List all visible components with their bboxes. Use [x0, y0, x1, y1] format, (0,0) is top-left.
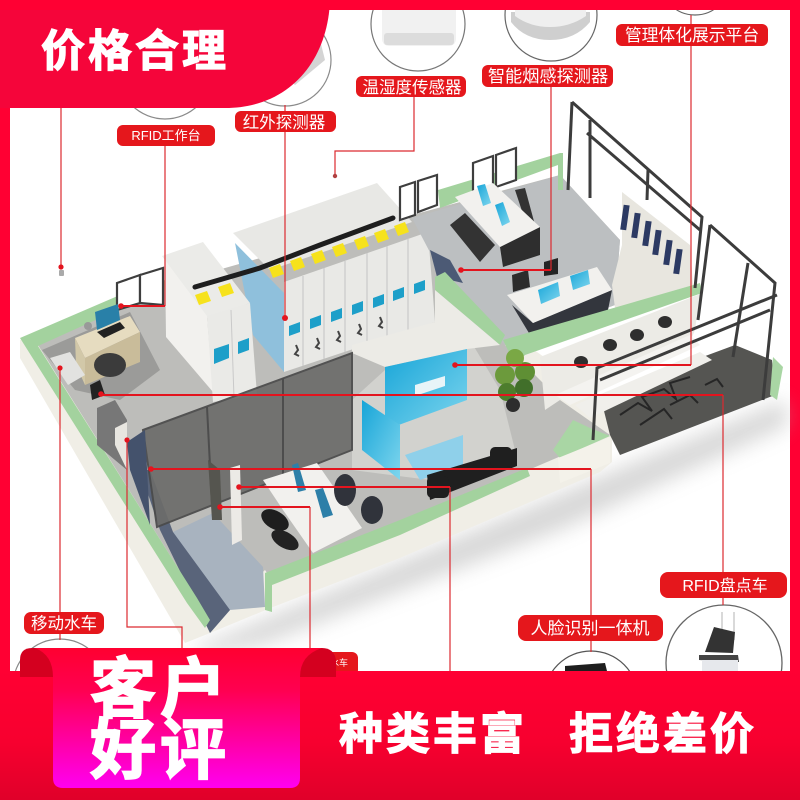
ribbon heading line two: 好评	[90, 713, 230, 787]
callout line: face recognition	[148, 466, 591, 652]
slab floor base	[38, 175, 620, 620]
banner heading: 价格合理	[41, 27, 229, 76]
device circle: face recognition terminal	[544, 651, 638, 745]
callout line: management platform	[452, 15, 691, 368]
label: humidity sensor: 温湿度传感器	[362, 78, 462, 97]
ribbon panel	[35, 648, 322, 788]
lobby floor tiles	[173, 513, 265, 633]
label: mobile water cart: 移动水车	[31, 614, 97, 633]
window frames	[400, 148, 516, 220]
label: infrared detector: 红外探测器	[243, 113, 326, 132]
callout line: RFID inventory cart	[98, 391, 723, 605]
label: mobile water cart	[24, 612, 104, 634]
central partition green rim	[435, 272, 505, 345]
right wing green end	[770, 357, 783, 400]
callout line: humidity sensor	[333, 97, 414, 178]
ribbon badge	[20, 648, 336, 788]
right ribbon fold	[300, 648, 336, 677]
glass partition	[143, 353, 352, 527]
lobby dark carpet	[140, 470, 230, 633]
centre room floor	[352, 340, 515, 480]
slogan text: 种类丰富	[339, 710, 527, 759]
reception desk	[75, 304, 140, 385]
device circle: RFID workbench	[118, 25, 212, 119]
callout line: lower-left sensor	[124, 437, 182, 650]
label: RFID workbench: RFID工作台	[131, 128, 201, 143]
floor shadow	[190, 400, 788, 655]
slogan text: 拒绝差价	[569, 710, 757, 759]
office blue carpet	[430, 250, 463, 283]
callout line: mobile water cart	[57, 365, 63, 640]
top-left price banner	[0, 0, 330, 108]
device circle: smoke detector	[505, 0, 597, 61]
device circle: RFID inventory cart	[666, 605, 782, 721]
large display screen	[385, 349, 467, 430]
bottom red band	[0, 671, 800, 800]
conference chair bases	[620, 377, 723, 425]
label: RFID inventory cart	[660, 572, 787, 598]
device circle: humidity sensor	[371, 0, 465, 71]
callout line: smoke detector	[458, 87, 551, 273]
mobile shelf block B	[233, 183, 435, 372]
conference floor	[600, 345, 775, 455]
glass partition frames	[568, 102, 777, 440]
conference table	[555, 335, 700, 405]
label: face recognition terminal: 人脸识别一体机	[530, 619, 650, 638]
callout line: RFID workbench	[118, 146, 165, 309]
label: smoke detector: 智能烟感探测器	[488, 66, 608, 86]
office green wall rim	[438, 153, 563, 208]
corner green block	[553, 420, 610, 458]
left room floor	[42, 312, 160, 400]
potted plant	[495, 349, 535, 412]
secondary display screen	[362, 400, 463, 480]
glass cabinet wall	[612, 192, 693, 308]
front green rim	[265, 468, 530, 612]
label: management platform: 管理体化展示平台	[625, 26, 759, 45]
callout line: top-left sensor	[58, 105, 64, 276]
top red strip	[0, 0, 800, 10]
label: RFID workbench	[117, 125, 215, 146]
black overhead rail	[195, 218, 393, 287]
partition mullions	[207, 378, 283, 505]
left ribbon fold	[20, 648, 53, 677]
device circle: infrared detector	[239, 14, 331, 106]
slab outer wall	[20, 300, 612, 643]
label: partially hidden tag: 水车	[330, 657, 348, 668]
corner wall face	[558, 437, 610, 483]
left perimeter green rim	[20, 280, 210, 628]
device circle: mobile water cart	[13, 639, 107, 733]
label: face recognition terminal	[518, 615, 663, 641]
floor plan illustration	[20, 102, 788, 655]
black sofa	[427, 447, 517, 500]
callout line: gate sensor	[236, 484, 450, 672]
central partition wall	[352, 290, 500, 367]
callout line: infrared detector	[282, 105, 288, 321]
device circle: management platform	[660, 0, 730, 15]
label: partially hidden tag	[325, 652, 358, 676]
conference room wall	[540, 294, 700, 410]
office room floor	[412, 175, 620, 345]
entrance gate posts	[208, 460, 242, 545]
mobile shelf block A	[162, 242, 257, 402]
office desk 1	[450, 183, 540, 267]
label: RFID inventory cart: RFID盘点车	[682, 576, 768, 595]
left cabinet and fixtures	[50, 352, 150, 525]
front reception desk	[258, 463, 383, 554]
ribbon heading line one: 客户	[90, 652, 230, 726]
conference room green rim	[503, 283, 702, 365]
conference chairs	[574, 316, 672, 368]
callout line: lower label	[217, 504, 310, 650]
office desk 2	[507, 258, 612, 343]
left room window frame	[117, 268, 163, 310]
